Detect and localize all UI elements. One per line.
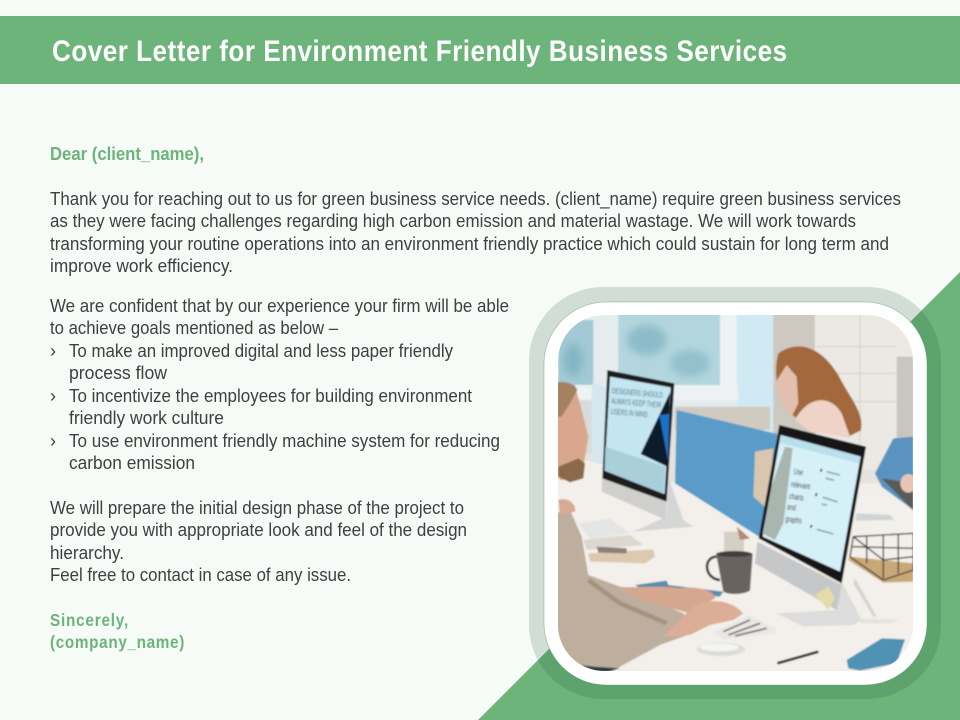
goals lead-in — [50, 296, 509, 338]
office photo: USERS IN MIND. — [610, 408, 650, 420]
basket — [848, 557, 913, 583]
goals bullet list — [50, 341, 500, 473]
mouse, pen, notebook — [697, 643, 745, 656]
goals bullet list: › — [50, 431, 56, 451]
signature: Sincerely, — [50, 610, 128, 630]
office photo: DESIGNERS SHOULD — [611, 387, 663, 400]
goals lead-in: We are confident that by our experience your firm will be able — [50, 296, 509, 316]
intro paragraph: as they were facing challenges regarding high carbon emission and material wastage. We will work towards — [50, 211, 856, 231]
signature — [50, 610, 184, 652]
office photo: graphs — [785, 515, 803, 526]
title: Cover Letter for Environment Friendly Business Services — [52, 34, 787, 67]
notes — [753, 448, 773, 510]
outer translucent ring — [529, 287, 941, 699]
intro paragraph: improve work efficiency. — [50, 256, 233, 276]
salutation: Dear (client_name), — [50, 144, 204, 164]
goals bullet list: carbon emission — [69, 453, 195, 473]
office photo: and — [786, 503, 796, 513]
goals bullet list: To make an improved digital and less paper friendly — [69, 341, 453, 361]
photo frame — [529, 287, 941, 699]
signature: (company_name) — [50, 632, 184, 652]
goals bullet list: › — [50, 386, 56, 406]
title banner — [0, 16, 960, 84]
blue panel — [675, 410, 777, 538]
intro paragraph — [50, 189, 901, 276]
goals bullet list: › — [50, 341, 56, 361]
closing paragraph — [50, 498, 467, 585]
desk items left — [578, 518, 630, 539]
goals bullet list: To incentivize the employees for building environment — [69, 386, 472, 406]
goals bullet list: process flow — [69, 363, 168, 383]
office photo — [553, 310, 920, 677]
monitor one — [633, 477, 693, 532]
office photo: relevant — [790, 481, 811, 492]
green diagonal background corner — [478, 272, 960, 720]
goals bullet list: To use environment friendly machine system for reducing — [69, 431, 500, 451]
monitor two — [777, 580, 862, 627]
tablet on desk — [635, 581, 723, 597]
intro paragraph: transforming your routine operations into an environment friendly practice which could sustain for long term and — [50, 234, 889, 254]
intro paragraph: Thank you for reaching out to us for green business service needs. (client_name) require green business services — [50, 189, 901, 210]
flower and pot — [724, 532, 744, 555]
desk — [558, 460, 672, 484]
mug — [707, 557, 720, 580]
man — [558, 512, 686, 671]
closing paragraph: Feel free to contact in case of any issue. — [50, 565, 351, 585]
chair at right — [875, 437, 913, 510]
woman — [776, 346, 861, 437]
office photo: Use — [793, 468, 804, 478]
closing paragraph: hierarchy. — [50, 543, 124, 563]
closing paragraph: provide you with appropriate look and feel of the design — [50, 520, 467, 540]
goals lead-in: to achieve goals mentioned as below – — [50, 318, 338, 338]
keyboard — [716, 616, 776, 638]
office photo: charts — [788, 493, 804, 503]
closing paragraph: We will prepare the initial design phase of the project to — [50, 498, 464, 518]
white frame — [544, 302, 927, 685]
office photo: ALWAYS KEEP THEIR — [611, 397, 662, 410]
goals bullet list: friendly work culture — [69, 408, 224, 428]
